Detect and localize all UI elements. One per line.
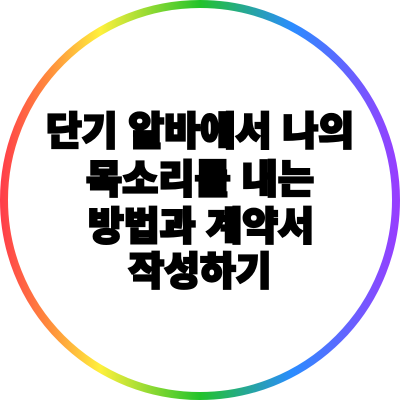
title: 방법과 계약서 <box>88 206 314 249</box>
title: 작성하기 <box>128 251 272 294</box>
title: 단기 알바에서 나의 <box>46 111 354 154</box>
title: 목소리를 내는 <box>86 159 314 202</box>
title <box>46 111 354 294</box>
